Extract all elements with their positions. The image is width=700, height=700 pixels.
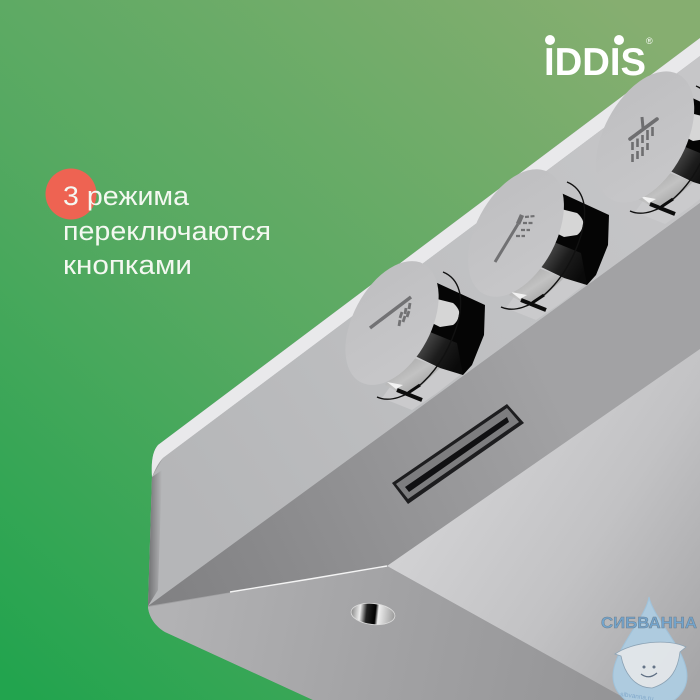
bathtub <box>615 642 686 688</box>
logo: iddis: ® <box>646 36 653 46</box>
body base <box>148 38 700 700</box>
middle dark face <box>148 203 700 606</box>
icon: shower <box>630 117 657 162</box>
right light face <box>387 349 700 700</box>
text block: modes <box>63 181 271 280</box>
top face <box>148 56 700 606</box>
wordmark: СИБВАННА <box>601 615 697 632</box>
bath face <box>641 666 657 677</box>
logo: iddis: IDDIS <box>544 41 646 84</box>
red accent circle <box>46 168 96 220</box>
slot outlet <box>392 404 524 504</box>
button 3: shower head <box>575 55 700 224</box>
bottom face <box>148 566 628 700</box>
left edge shading <box>148 470 162 606</box>
watermark: sibvanna <box>601 597 697 700</box>
button 2: toothbrush <box>448 153 609 320</box>
white top edge <box>152 38 700 477</box>
icon: hand shower with side spray <box>495 215 535 262</box>
text block: modes: 3 режима <box>63 181 190 211</box>
text block: modes: кнопками <box>63 250 192 280</box>
button 1: handheld shower <box>326 246 485 410</box>
round hole <box>350 601 396 627</box>
icon: spout with spray <box>370 297 411 328</box>
drop <box>613 597 687 700</box>
highlight crease <box>230 566 387 592</box>
product body <box>148 38 700 700</box>
text block: modes: переключаются <box>63 216 271 246</box>
